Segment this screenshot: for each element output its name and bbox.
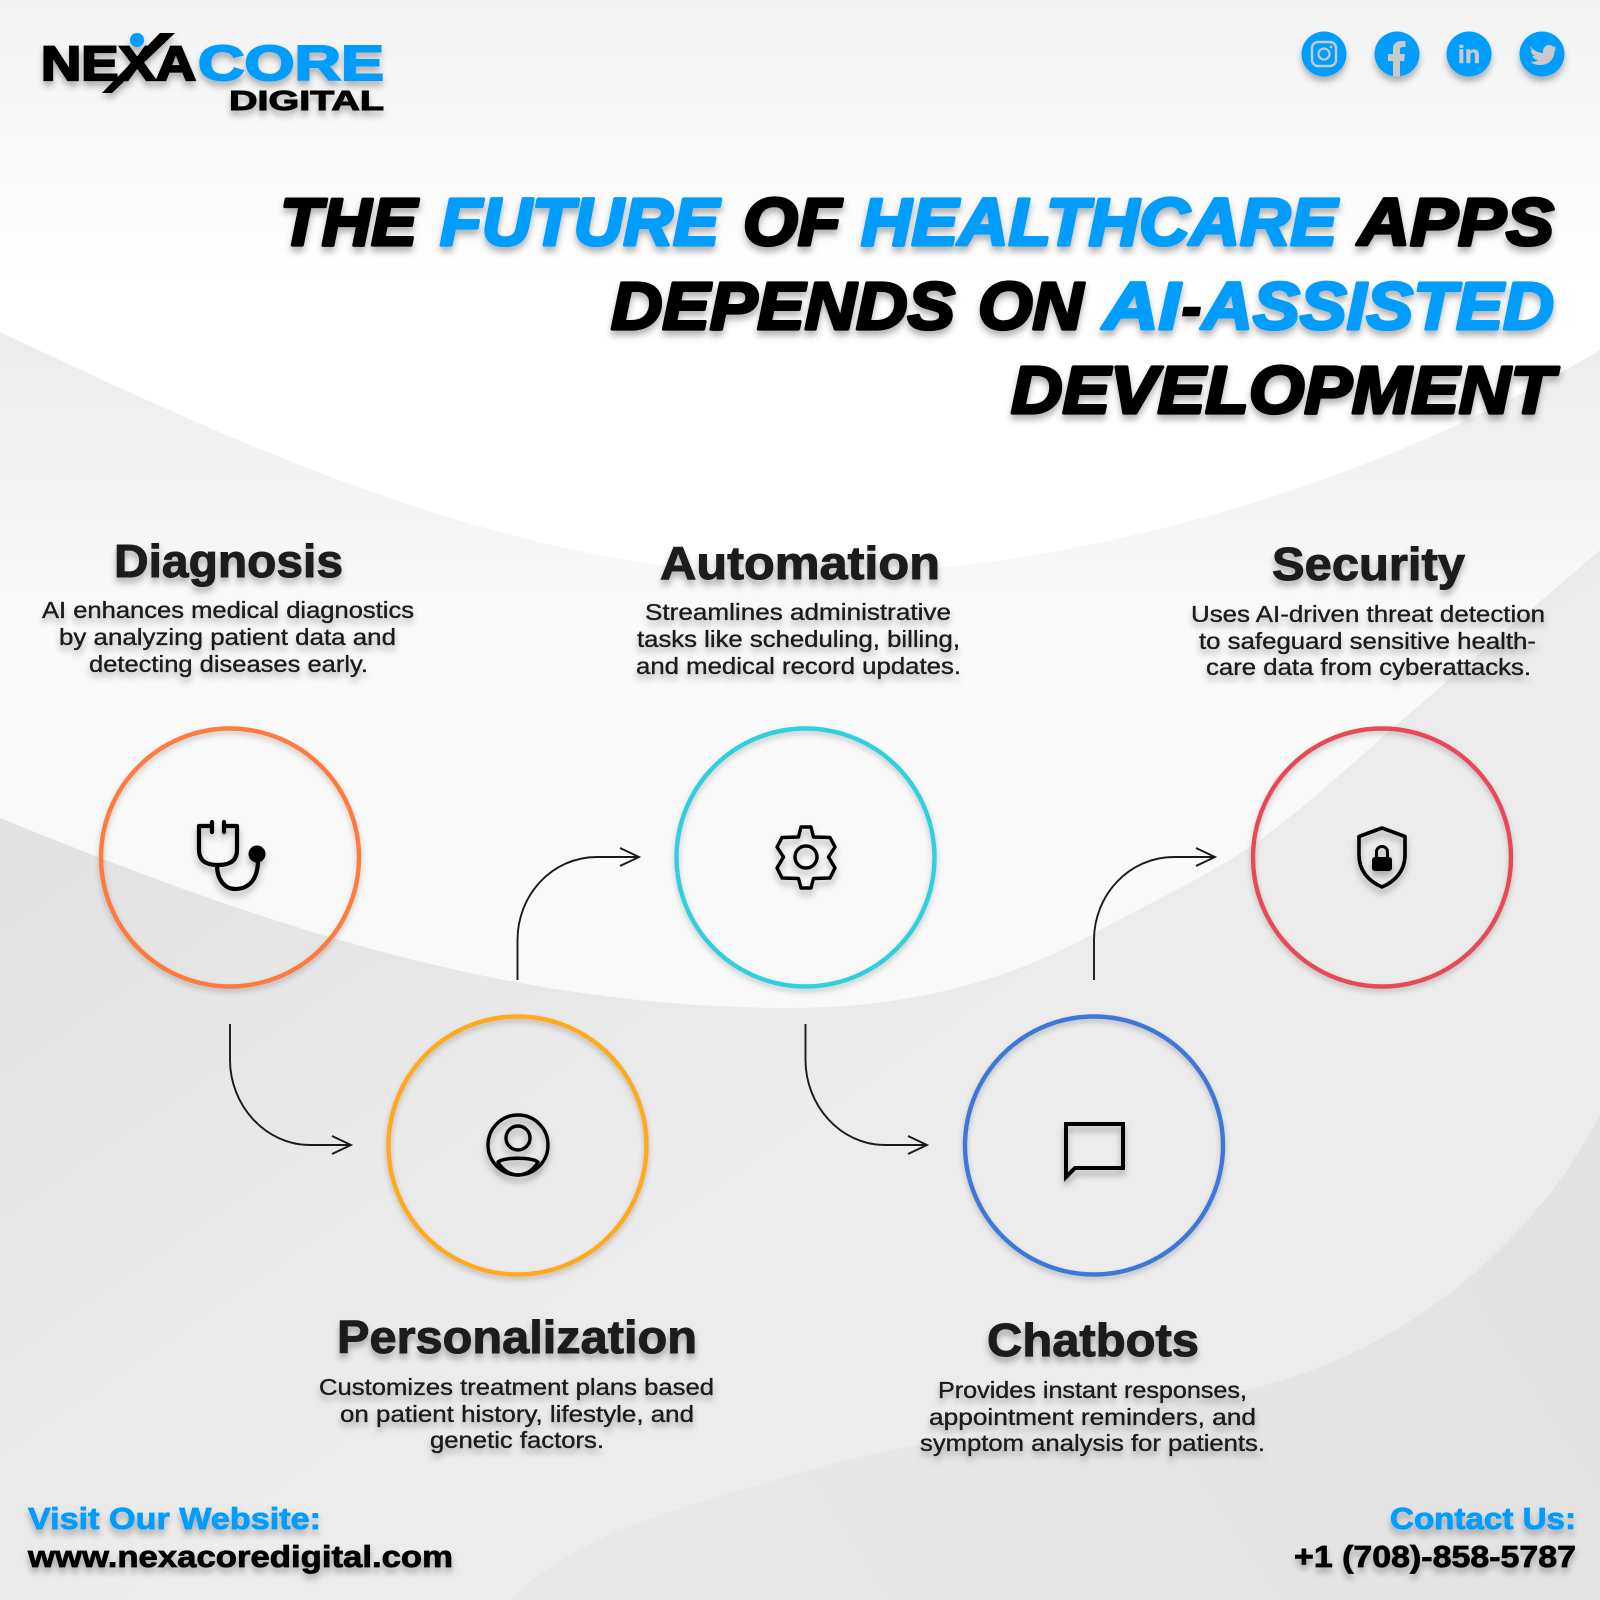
logo: NexaCore Digital: CORE bbox=[198, 37, 384, 91]
text block: Diagnosis: Diagnosis bbox=[114, 535, 343, 587]
title: HEALTHCARE bbox=[861, 185, 1339, 260]
text block: Security: to safeguard sensitive health- bbox=[1199, 628, 1536, 654]
circle: Personalization bbox=[388, 1016, 646, 1274]
text block: Chatbots: Chatbots bbox=[987, 1314, 1199, 1366]
footer: contact: Contact Us: bbox=[1390, 1501, 1576, 1536]
arrow: Diagnosis to Personalization bbox=[230, 1024, 351, 1154]
text block: Personalization: genetic factors. bbox=[430, 1427, 604, 1453]
icon: twitter bbox=[1520, 32, 1564, 76]
icon: chat bubble bbox=[1066, 1124, 1123, 1177]
circle: Security bbox=[1253, 728, 1511, 986]
title: OF bbox=[743, 185, 843, 260]
icon: gear bbox=[777, 827, 835, 888]
arrow: Automation to Chatbots bbox=[806, 1024, 927, 1154]
icon: linkedin: in bbox=[1458, 41, 1480, 69]
text block: Automation bbox=[636, 537, 961, 679]
title: - bbox=[1181, 269, 1202, 344]
title: THE bbox=[280, 185, 419, 260]
icon: shield with lock bbox=[1359, 828, 1405, 887]
text block: Diagnosis: detecting diseases early. bbox=[89, 651, 368, 677]
circle: Automation bbox=[676, 728, 934, 986]
footer: website bbox=[27, 1501, 453, 1574]
text block: Automation: Automation bbox=[660, 537, 940, 589]
text block: Security: Uses AI-driven threat detection bbox=[1191, 601, 1545, 627]
text block: Chatbots: appointment reminders, and bbox=[929, 1404, 1256, 1430]
icon: instagram bbox=[1302, 32, 1346, 76]
title: ASSISTED bbox=[1200, 269, 1554, 344]
footer: website: Visit Our Website: bbox=[28, 1501, 321, 1536]
text block: Personalization: Personalization bbox=[337, 1311, 697, 1363]
text block: Chatbots bbox=[920, 1314, 1265, 1456]
text block: Automation: tasks like scheduling, billing, bbox=[637, 626, 960, 652]
footer: contact bbox=[1294, 1501, 1576, 1574]
text block: Chatbots: Provides instant responses, bbox=[938, 1377, 1247, 1403]
footer: contact: +1 (708)-858-5787 bbox=[1294, 1539, 1576, 1574]
text block: Security bbox=[1191, 538, 1545, 680]
social icons bbox=[1302, 32, 1564, 76]
circle: Chatbots bbox=[965, 1016, 1223, 1274]
arrow: Chatbots to Security bbox=[1094, 848, 1215, 980]
icon: linkedin bbox=[1446, 32, 1492, 76]
text block: Personalization bbox=[319, 1311, 714, 1453]
title bbox=[280, 185, 1559, 428]
text block: Security: Security bbox=[1272, 538, 1465, 590]
text block: Diagnosis bbox=[42, 535, 414, 677]
circle: Diagnosis bbox=[101, 728, 359, 986]
text block: Personalization: Customizes treatment plans based bbox=[319, 1374, 714, 1400]
text block: Diagnosis: AI enhances medical diagnostics bbox=[42, 597, 414, 623]
title: AI bbox=[1101, 269, 1182, 344]
text block: Personalization: on patient history, lifestyle, and bbox=[340, 1401, 694, 1427]
text block: Diagnosis: by analyzing patient data and bbox=[59, 624, 396, 650]
logo: NexaCore Digital bbox=[41, 33, 384, 116]
text block: Automation: and medical record updates. bbox=[636, 653, 961, 679]
title: DEPENDS bbox=[611, 269, 955, 344]
arrow: Personalization to Automation bbox=[518, 848, 639, 980]
logo: NexaCore Digital: NEXA bbox=[41, 38, 196, 91]
title: FUTURE bbox=[440, 185, 721, 260]
footer: website: www.nexacoredigital.com bbox=[27, 1539, 453, 1574]
icon: facebook bbox=[1374, 32, 1420, 76]
title: APPS bbox=[1356, 185, 1554, 260]
title: ON bbox=[978, 269, 1085, 344]
icon: stethoscope bbox=[199, 822, 266, 889]
text block: Automation: Streamlines administrative bbox=[645, 599, 951, 625]
icon: user bbox=[488, 1115, 548, 1175]
text block: Chatbots: symptom analysis for patients. bbox=[920, 1430, 1265, 1456]
title: DEVELOPMENT bbox=[1011, 353, 1559, 428]
logo: NexaCore Digital: DIGITAL bbox=[229, 85, 384, 116]
text block: Security: care data from cyberattacks. bbox=[1206, 654, 1531, 680]
